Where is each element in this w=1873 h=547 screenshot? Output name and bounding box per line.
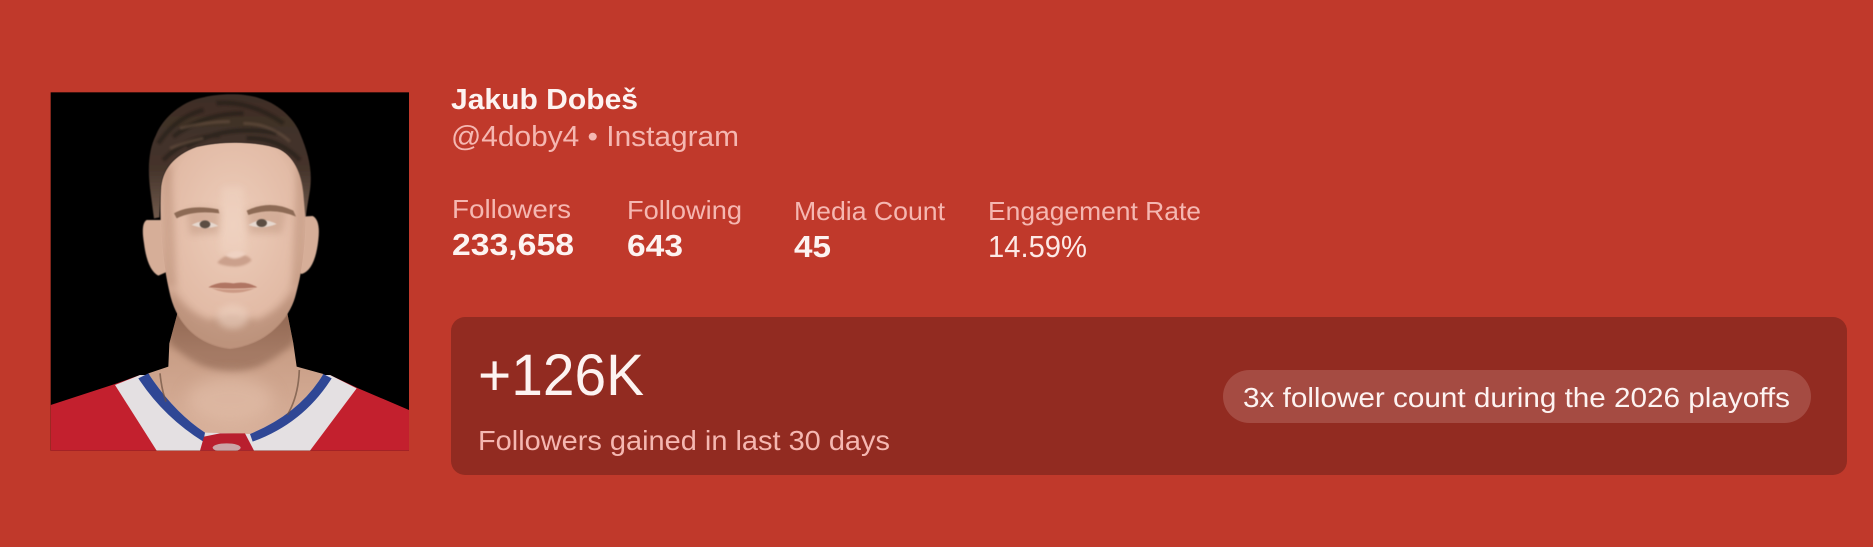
stat: followers: Followers bbox=[452, 194, 571, 224]
callout pill bbox=[1223, 370, 1811, 423]
mouth bbox=[208, 283, 257, 289]
face bbox=[160, 142, 306, 349]
hair bbox=[149, 94, 311, 218]
player name: Jakub Dobeš bbox=[451, 84, 638, 116]
ears bbox=[143, 216, 319, 276]
stat: engagement rate: 14.59% bbox=[988, 229, 1087, 264]
infographic canvas bbox=[50, 88, 1847, 475]
callout pill: 3x follower count during the 2026 playoffs bbox=[1243, 382, 1790, 413]
stat: media count: 45 bbox=[794, 229, 831, 264]
growth caption: Followers gained in last 30 days bbox=[478, 425, 890, 456]
stat: following: 643 bbox=[627, 228, 683, 263]
eyes bbox=[192, 221, 218, 228]
brows bbox=[174, 207, 219, 218]
stat: followers: 233,658 bbox=[452, 227, 574, 262]
handle and platform: @4doby4 • Instagram bbox=[451, 121, 739, 153]
stat: engagement rate: Engagement Rate bbox=[988, 196, 1201, 226]
nose bbox=[217, 254, 252, 267]
stat: following bbox=[627, 195, 742, 263]
stat: media count bbox=[794, 196, 946, 264]
panel: follower growth bbox=[451, 317, 1847, 475]
big number: +126K bbox=[478, 343, 644, 408]
player photo bbox=[51, 92, 409, 452]
stat: engagement rate bbox=[988, 196, 1201, 264]
stat: followers bbox=[452, 194, 574, 262]
stat: following: Following bbox=[627, 195, 742, 225]
stat: media count: Media Count bbox=[794, 196, 946, 226]
